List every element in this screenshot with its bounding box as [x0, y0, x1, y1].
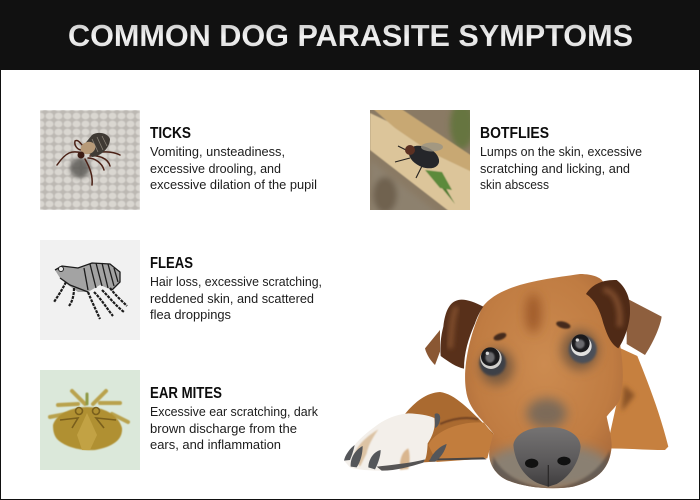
text: ticks symptoms — [150, 145, 317, 192]
right eye — [569, 334, 597, 363]
image: flea engraving — [40, 240, 322, 340]
left eye — [479, 347, 506, 376]
panel: ticks — [40, 110, 317, 210]
text: botflies symptoms: Lumps on the skin, excessive — [480, 145, 642, 159]
image: botfly on leaf — [370, 110, 642, 210]
head — [465, 274, 623, 488]
panel: ear mites — [40, 370, 319, 470]
claws — [344, 413, 447, 469]
image: ear mite micrograph — [40, 370, 319, 470]
heading: ticks: TICKS — [150, 125, 191, 142]
right ear — [586, 280, 630, 348]
panel: fleas — [40, 240, 322, 340]
left ear flap — [425, 330, 440, 365]
title: COMMON DOG PARASITE SYMPTOMS — [68, 18, 633, 53]
text: botflies symptoms — [480, 145, 642, 192]
text: botflies symptoms: skin abscess — [480, 178, 549, 192]
panel: botflies — [370, 110, 642, 210]
text: fleas symptoms: reddened skin, and scattered — [150, 292, 314, 306]
text: ticks symptoms: excessive dilation of the pupil — [150, 178, 317, 192]
text: ear mites symptoms: brown discharge from the — [150, 422, 297, 436]
text: fleas symptoms: flea droppings — [150, 308, 231, 322]
text: botflies symptoms: scratching and licking, and — [480, 162, 630, 176]
right ear flap — [627, 298, 662, 355]
text: ticks symptoms: excessive drooling, and — [150, 162, 281, 176]
text: ticks symptoms: Vomiting, unsteadiness, — [150, 145, 285, 159]
image: tick on fabric — [40, 110, 317, 210]
text: fleas symptoms: Hair loss, excessive scratching, — [150, 275, 322, 289]
heading: ear mites: EAR MITES — [150, 385, 222, 402]
text: fleas symptoms — [150, 275, 322, 322]
title banner — [0, 0, 700, 70]
white paw — [344, 413, 435, 471]
text: ear mites symptoms: Excessive ear scratching, dark — [150, 405, 319, 419]
text: ear mites symptoms — [150, 405, 319, 452]
text: ear mites symptoms: ears, and inflammation — [150, 438, 281, 452]
image: sad dog resting head on paw — [344, 274, 668, 493]
body — [607, 345, 668, 450]
foreleg — [405, 392, 493, 462]
heading: botflies: BOTFLIES — [480, 125, 549, 142]
nose — [513, 427, 581, 487]
left ear — [440, 300, 483, 369]
heading: fleas: FLEAS — [150, 255, 193, 272]
